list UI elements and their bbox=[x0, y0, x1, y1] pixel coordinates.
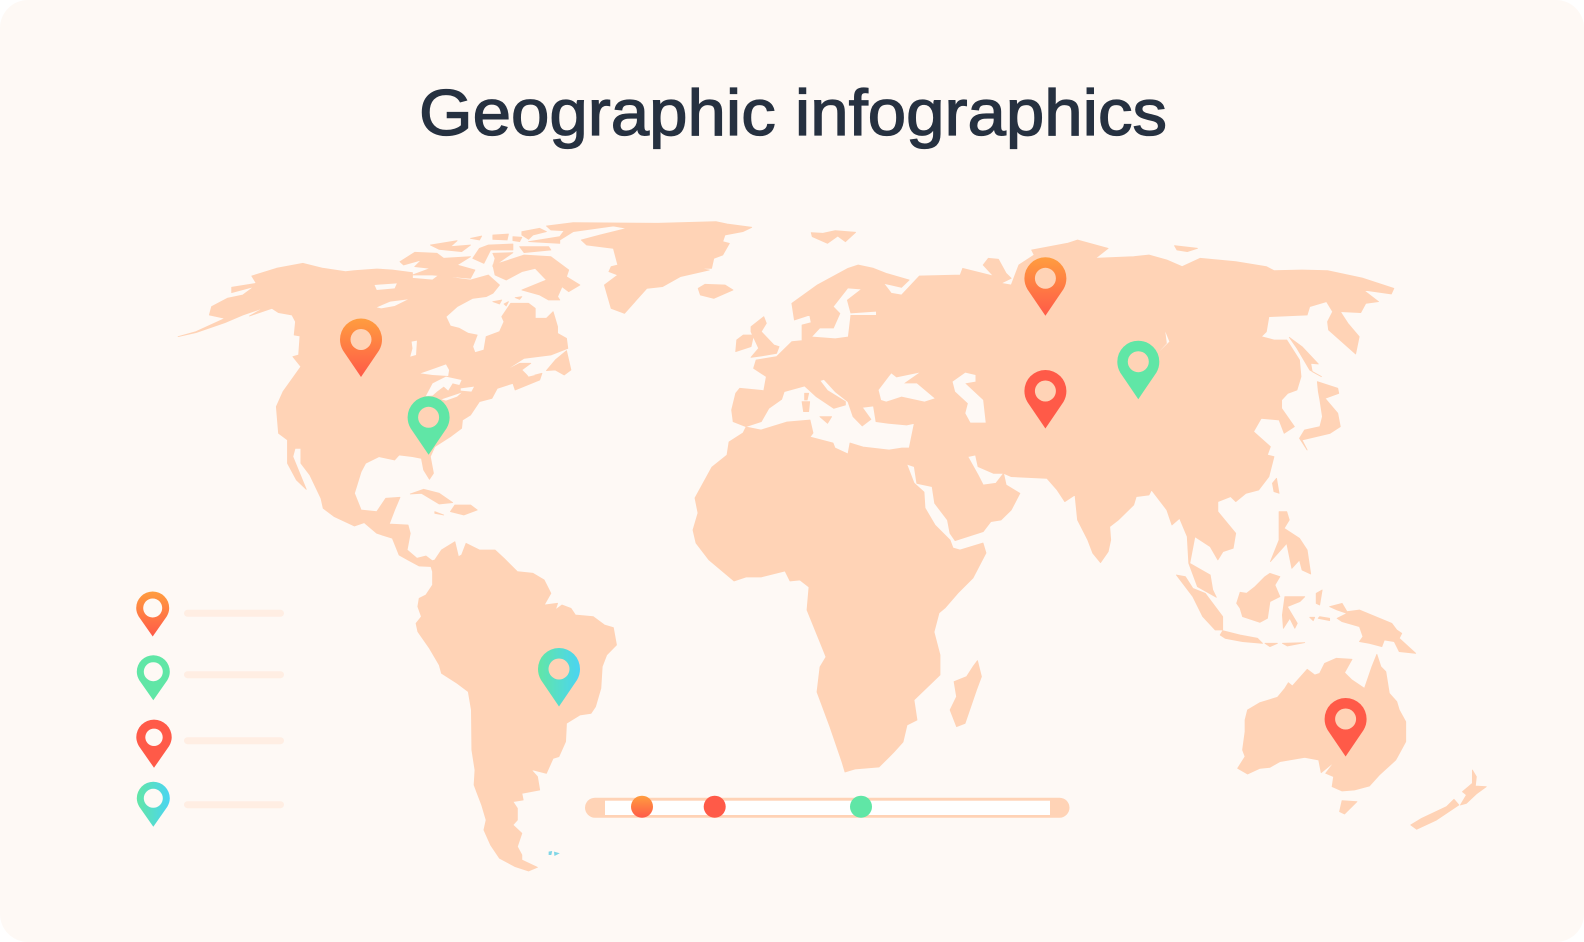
victoria island bbox=[400, 252, 475, 278]
pin: australia red bbox=[1325, 698, 1367, 756]
continent: africa bbox=[693, 420, 986, 772]
bar track bbox=[585, 798, 1070, 818]
title: Geographic infographics bbox=[419, 76, 1167, 149]
sakhalin bbox=[1289, 337, 1321, 377]
iceland bbox=[698, 284, 733, 298]
legend item: cyan pin bbox=[137, 782, 170, 827]
tasmania bbox=[1340, 801, 1357, 814]
lake: michigan and huron bbox=[426, 377, 462, 396]
jamaica bbox=[435, 512, 444, 515]
pin: north america green bbox=[408, 396, 450, 455]
japan bbox=[1299, 382, 1340, 450]
sumatra bbox=[1176, 575, 1223, 630]
legend line: green bbox=[184, 671, 284, 678]
taiwan bbox=[1272, 478, 1279, 493]
continent: south america bbox=[416, 542, 616, 871]
hudson bay islands bbox=[493, 283, 553, 306]
lakes: great slave and athabasca bbox=[375, 283, 408, 308]
lake baikal bbox=[1159, 332, 1169, 352]
arctic islands bbox=[430, 228, 551, 267]
continent: north america and greenland bbox=[178, 222, 752, 567]
madagascar, indonesia, australia, new zealand bbox=[950, 573, 1486, 829]
madagascar bbox=[950, 661, 981, 727]
ireland bbox=[736, 335, 754, 352]
new zealand bbox=[1411, 770, 1486, 829]
pin: south america cyan bbox=[538, 648, 580, 706]
marker: red bbox=[704, 796, 726, 818]
hispaniola bbox=[450, 505, 477, 515]
legend line: orange bbox=[184, 610, 284, 617]
java and lesser sunda bbox=[1220, 631, 1305, 647]
baltic sea bbox=[812, 288, 876, 338]
pin: asia green bbox=[1117, 341, 1159, 399]
pin: asia red bbox=[1024, 370, 1066, 428]
arctic russian islands bbox=[1174, 246, 1197, 252]
timeline scale bar bbox=[585, 796, 1070, 818]
pin: russia orange bbox=[1024, 257, 1066, 316]
marker: orange bbox=[631, 796, 653, 818]
baffin island bbox=[493, 255, 580, 300]
maluku bbox=[1310, 590, 1330, 621]
newfoundland bbox=[546, 351, 571, 375]
gulf of st lawrence detail bbox=[526, 359, 540, 377]
pin: north america orange bbox=[340, 318, 382, 377]
philippines bbox=[1270, 512, 1311, 574]
continent: eurasia bbox=[732, 231, 1394, 597]
bar inner bbox=[605, 801, 1050, 815]
mediterranean islands bbox=[802, 393, 832, 423]
world map bbox=[178, 222, 1486, 871]
lake: winnipeg bbox=[410, 341, 417, 357]
marker: green bbox=[850, 796, 872, 818]
caspian sea bbox=[953, 373, 986, 423]
sulawesi bbox=[1282, 597, 1305, 628]
falkland islands bbox=[549, 851, 560, 856]
greenland bbox=[529, 222, 752, 313]
svalbard bbox=[811, 231, 856, 243]
lake: erie and ontario bbox=[441, 387, 474, 401]
lake: superior bbox=[421, 364, 449, 376]
legend line: red bbox=[184, 737, 284, 744]
cuba bbox=[410, 489, 453, 504]
legend item: orange pin bbox=[136, 592, 169, 636]
legend item: green pin bbox=[137, 655, 170, 700]
legend line: cyan bbox=[184, 801, 284, 808]
black sea bbox=[879, 373, 935, 402]
australia bbox=[1238, 654, 1406, 791]
borneo bbox=[1237, 573, 1280, 622]
legend item: red pin bbox=[136, 720, 172, 768]
great britain bbox=[751, 317, 779, 357]
legend bbox=[136, 592, 284, 827]
new guinea bbox=[1330, 603, 1416, 653]
